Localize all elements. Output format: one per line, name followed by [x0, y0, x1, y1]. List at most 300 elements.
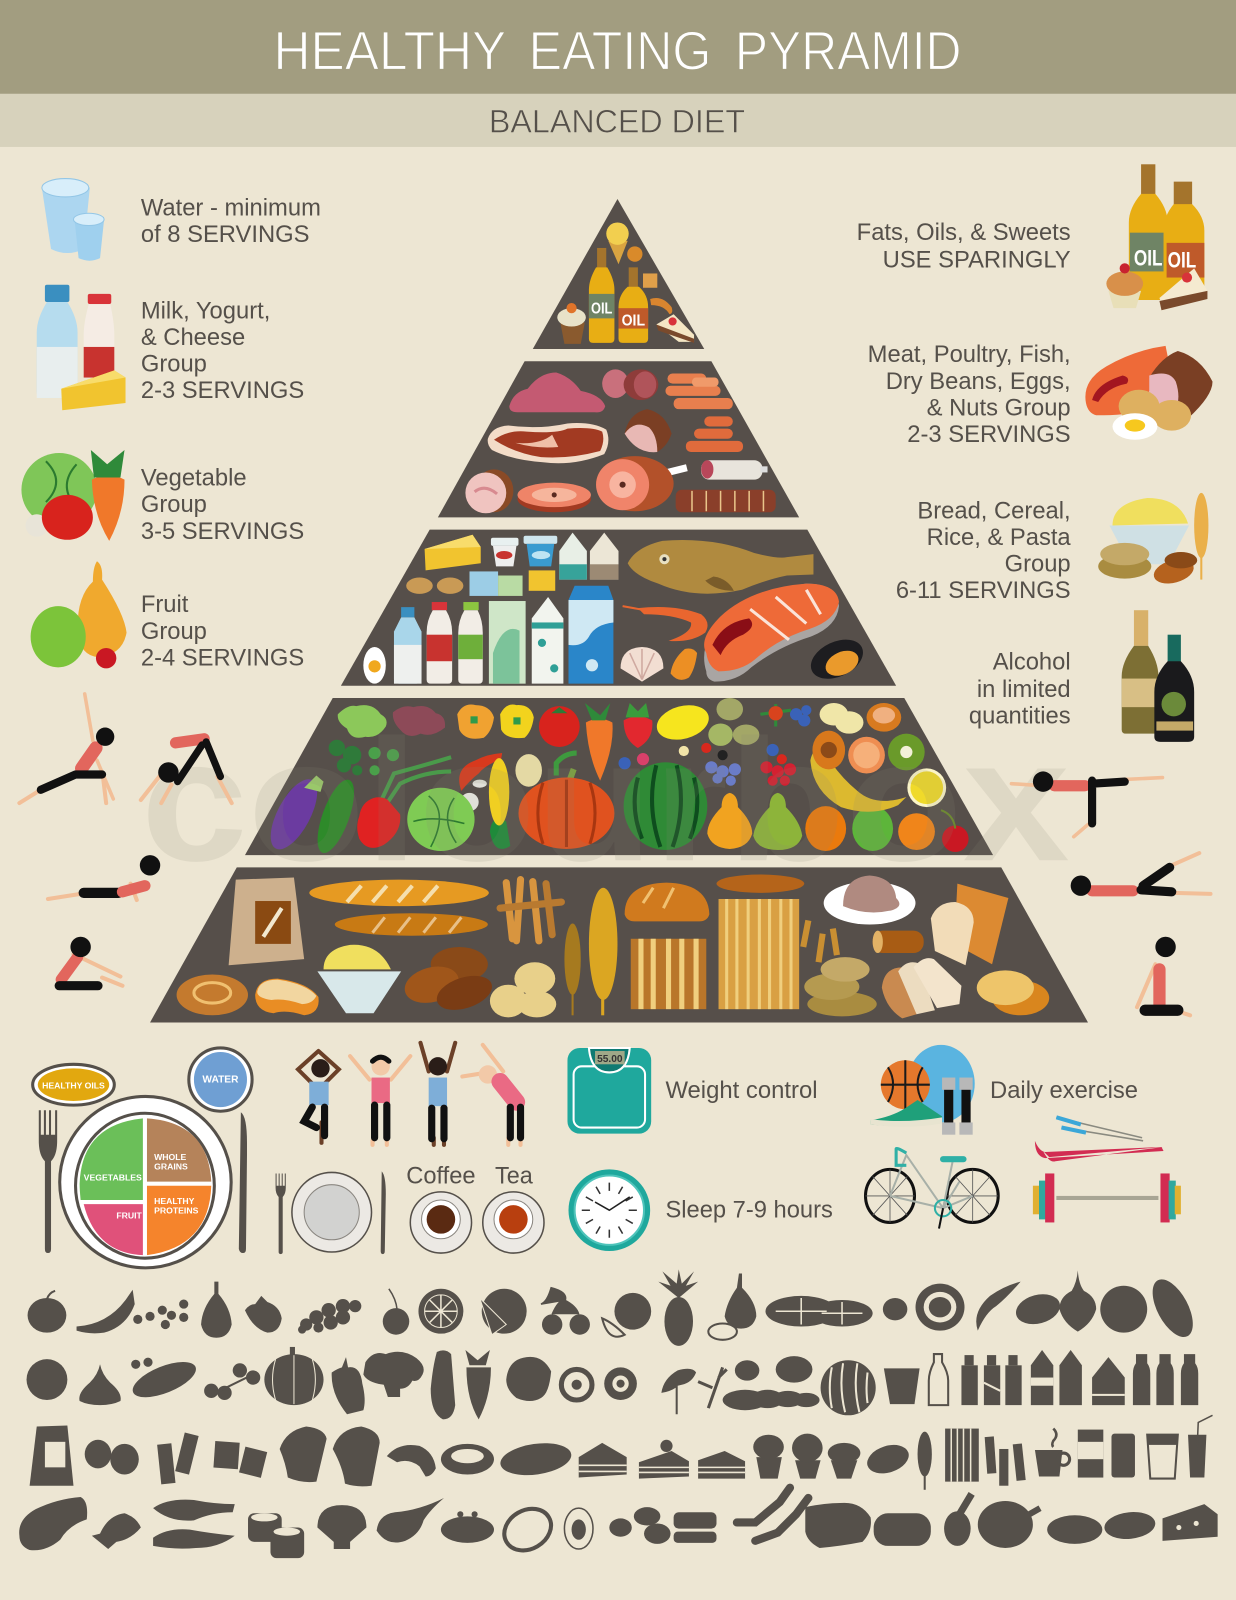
- small baguette: [716, 874, 804, 893]
- cupcake: [792, 1434, 823, 1479]
- bread: [333, 1427, 380, 1486]
- person: side bend: [462, 1045, 521, 1145]
- pepper: [332, 1357, 365, 1414]
- cherry: [941, 810, 969, 852]
- figure: forward bend: [141, 739, 232, 803]
- lemon: [653, 700, 713, 745]
- cheese wedge: [425, 535, 481, 570]
- carton: [1059, 1350, 1082, 1405]
- biscuits: [804, 957, 877, 1016]
- strawberry drink: [427, 602, 452, 684]
- tier 5: bread and grains: [150, 867, 1088, 1022]
- carrot: [465, 1350, 491, 1419]
- right legend: [857, 164, 1213, 742]
- mussel: [805, 632, 869, 687]
- fusilli: [985, 1436, 1026, 1486]
- salami: [602, 369, 658, 400]
- pear pair: [708, 1273, 756, 1340]
- people exercising: [298, 1043, 521, 1145]
- bowl of mash: [317, 945, 401, 1013]
- garlic: [79, 1364, 121, 1405]
- fish: [153, 1500, 235, 1521]
- icon: bicycle: [866, 1148, 998, 1229]
- fish: [628, 540, 813, 594]
- yogurt: [491, 538, 518, 566]
- chili: [976, 1282, 1021, 1331]
- flour bag: [30, 1426, 73, 1486]
- sausages: [686, 416, 743, 452]
- bean: [1103, 1510, 1157, 1541]
- tea label: Tea: [495, 1163, 533, 1190]
- icon: coffee cup: [410, 1192, 472, 1253]
- spaghetti: [719, 899, 799, 1009]
- slices and potatoes: [723, 1356, 820, 1410]
- corn: [489, 758, 510, 849]
- eggs: [406, 578, 463, 594]
- meat text: 2-3 SERVINGS: [907, 421, 1071, 448]
- garlic: [460, 780, 487, 811]
- figure: warrior pose: [1011, 771, 1163, 837]
- coffee label: Coffee: [406, 1163, 476, 1190]
- herb: [698, 1367, 727, 1408]
- row 3: grains and sweets silhouettes: [30, 1415, 1213, 1490]
- bread: [280, 1427, 327, 1482]
- bottle: [1133, 1354, 1150, 1405]
- carrot: [585, 703, 613, 781]
- smoked sausage link: [676, 490, 776, 512]
- meat text: Dry Beans, Eggs,: [886, 368, 1071, 395]
- fruit text: Group: [141, 618, 207, 645]
- icon: oils and sweets: OIL: [1168, 247, 1196, 272]
- baguette: [309, 880, 489, 906]
- gourd slice: [916, 1284, 965, 1331]
- short pasta: [631, 939, 706, 1009]
- bottle: [961, 1355, 978, 1405]
- lettuce: [363, 1352, 424, 1397]
- blue carton: [568, 586, 613, 684]
- icon: empty plate: [292, 1172, 372, 1252]
- crackers: [213, 1441, 267, 1478]
- cake: [579, 1443, 627, 1478]
- peas: [368, 747, 399, 776]
- oil bottle: OIL: [591, 300, 612, 317]
- ham: [978, 1501, 1040, 1548]
- banana slices: [820, 703, 863, 734]
- pumpkin: [518, 768, 614, 849]
- meat slice: [1047, 1515, 1102, 1544]
- cup: [884, 1368, 920, 1404]
- orange fruit: [805, 806, 846, 851]
- strawberry: [245, 1296, 282, 1333]
- bottle: [1156, 1354, 1174, 1405]
- fruit text: 2-4 SERVINGS: [141, 644, 304, 671]
- water text: Water - minimum: [141, 194, 321, 221]
- carton: [1031, 1350, 1053, 1405]
- round ham: [465, 469, 513, 513]
- figure: plank leg lift: [1071, 853, 1210, 896]
- bread slices: [882, 958, 961, 1018]
- milk text: & Cheese: [141, 324, 245, 351]
- bread text: 6-11 SERVINGS: [896, 577, 1071, 604]
- baguette: [335, 913, 488, 936]
- jar: [1078, 1430, 1103, 1478]
- cookie: [627, 246, 642, 262]
- round loaf: [625, 883, 709, 921]
- lettuce: [338, 705, 387, 738]
- chili: [459, 753, 502, 791]
- icon: knife: [239, 1112, 247, 1253]
- apple: [28, 1291, 66, 1333]
- icon: vegetables: [21, 450, 125, 541]
- small fusilli: [803, 920, 837, 962]
- cucumber: [128, 1355, 201, 1405]
- watermelon: [624, 762, 707, 850]
- vegetable text: Vegetable: [141, 465, 247, 492]
- burger: [674, 1512, 716, 1543]
- cupcake: [828, 1443, 860, 1479]
- small place setting: [276, 1171, 386, 1254]
- icon: water circle: WATER: [202, 1075, 239, 1086]
- bagel: [441, 1444, 494, 1474]
- icon: sports equipment: [871, 1045, 975, 1135]
- large wheat: [589, 888, 617, 1015]
- fats text: USE SPARINGLY: [883, 246, 1071, 273]
- basil: [556, 753, 577, 776]
- water text: of 8 SERVINGS: [141, 221, 310, 248]
- banana: [810, 746, 906, 812]
- salmon steak: [704, 584, 839, 682]
- silhouette icons: [19, 1269, 1218, 1559]
- small roll: [873, 931, 924, 953]
- tier 2: meat: [438, 361, 799, 517]
- bread rolls: [977, 970, 1049, 1015]
- green pear: [753, 793, 802, 850]
- milk text: 2-3 SERVINGS: [141, 377, 304, 404]
- potato: [863, 1440, 912, 1478]
- salami: [874, 1513, 931, 1546]
- ham chunk: [625, 409, 672, 452]
- bread loaf: [931, 884, 1008, 965]
- cupcake: [557, 303, 586, 344]
- icon: barbell: [1033, 1173, 1181, 1222]
- figure: triangle pose: [19, 694, 114, 803]
- toast: [255, 979, 319, 1015]
- cupcake: [753, 1435, 784, 1479]
- row 1: fruit silhouettes: [28, 1269, 1201, 1346]
- onion: [1059, 1270, 1096, 1332]
- yellow pepper: [500, 704, 534, 738]
- chart: MyPlate quadrants: [76, 1113, 214, 1258]
- person: tree pose: [298, 1051, 339, 1143]
- icon: ski poles: [1056, 1117, 1143, 1141]
- mussel: [497, 1501, 559, 1559]
- striped fish: [92, 1513, 141, 1549]
- icon: bread and cereal: [1098, 493, 1208, 588]
- subtitle: BALANCED DIET: [489, 103, 745, 140]
- meat slice: [517, 483, 591, 512]
- title: EATING: [529, 19, 711, 81]
- alcohol text: quantities: [969, 702, 1071, 729]
- pepper slice: [561, 1369, 592, 1400]
- pasta: [945, 1429, 979, 1482]
- pineapple: [658, 1269, 698, 1346]
- cheese wedge: [1163, 1504, 1218, 1541]
- berries: [133, 1299, 188, 1329]
- icon: ski blue handles: [1056, 1117, 1086, 1133]
- fruit slice: FRUIT: [116, 1210, 143, 1220]
- orange slice: [848, 737, 885, 773]
- potatoes: [490, 962, 556, 1017]
- egg: [564, 1508, 593, 1549]
- cheese cube: [529, 570, 555, 591]
- green apple: [852, 806, 893, 851]
- icon: skis: [1035, 1141, 1164, 1162]
- glass with straw: [1188, 1415, 1213, 1478]
- cookies: [85, 1440, 139, 1474]
- oil bottle: [589, 248, 614, 343]
- gooseberry: [883, 1298, 907, 1320]
- small carton: [590, 533, 619, 580]
- daily exercise label: Daily exercise: [990, 1077, 1138, 1104]
- milk text: Group: [141, 350, 207, 377]
- can: [1111, 1434, 1135, 1478]
- bread text: Rice, & Pasta: [927, 524, 1071, 551]
- teal carton: [532, 597, 563, 684]
- icon: small fork: [276, 1173, 286, 1254]
- croissant: [650, 298, 672, 314]
- grapes: [298, 1299, 361, 1334]
- blue grapes: [705, 761, 741, 786]
- loaf: [498, 1439, 573, 1479]
- purple lettuce: [393, 706, 445, 736]
- fruit slice: [84, 1204, 143, 1255]
- weight control label: Weight control: [665, 1077, 818, 1104]
- shell: [317, 1505, 366, 1549]
- icon: meat, fish, eggs: [1085, 346, 1213, 440]
- strawberry: [624, 703, 652, 748]
- alcohol text: Alcohol: [993, 648, 1071, 675]
- vegetables slice: VEGETABLES: [84, 1173, 142, 1183]
- icon: oils and sweets: OIL: [1134, 245, 1163, 270]
- cherry: [383, 1289, 409, 1335]
- milk text: Milk, Yogurt,: [141, 297, 270, 324]
- bottle: [1005, 1355, 1022, 1405]
- mound of raw meat: [509, 372, 605, 412]
- apple with slice: [602, 1293, 651, 1337]
- orange slice: [418, 1289, 463, 1334]
- oil bottle: [619, 267, 648, 343]
- oil bottle: OIL: [622, 313, 645, 330]
- whole grains slice: [147, 1118, 211, 1182]
- icon: milk, yogurt, cheese: [37, 285, 126, 410]
- bottle: [1181, 1354, 1198, 1405]
- title: PYRAMID: [735, 19, 961, 81]
- subheader band: [0, 94, 1236, 147]
- plate of meat: [824, 876, 916, 924]
- salmon steak: [19, 1497, 87, 1550]
- icon: small knife: [381, 1171, 386, 1254]
- cherries: [541, 1288, 590, 1335]
- vegetables slice: [80, 1118, 143, 1200]
- icon: clock: [568, 1169, 650, 1251]
- tier 3: dairy and fish: [341, 530, 896, 687]
- row 2: vegetables and dairy silhouettes: [27, 1347, 1198, 1419]
- gooseberries: [708, 698, 759, 746]
- crab: [441, 1511, 494, 1543]
- sleep label: Sleep 7-9 hours: [665, 1196, 833, 1223]
- tomato: [539, 706, 580, 747]
- lemon slice: [907, 768, 946, 807]
- tier 4: vegetables and fruit: [245, 698, 993, 857]
- cabbage: [407, 788, 475, 851]
- red pepper: [357, 797, 400, 848]
- steak: [805, 1503, 871, 1548]
- icon: healthy oils oval: [33, 1064, 114, 1105]
- biscuit bars: [157, 1433, 199, 1484]
- icon: fork: [39, 1110, 57, 1253]
- croissant: [387, 1445, 436, 1477]
- white salami: [701, 460, 768, 480]
- parsley: [204, 1363, 260, 1400]
- corn: [431, 1350, 455, 1419]
- big ham with bone: [596, 456, 688, 511]
- citrus slice: [604, 1367, 637, 1400]
- orange: [898, 813, 935, 850]
- cinnamon bun: [177, 974, 248, 1015]
- icon: fruit: [31, 561, 127, 668]
- orange pear: [707, 793, 752, 849]
- milk bottle: [929, 1354, 948, 1405]
- butter packs: [469, 571, 523, 596]
- carton: [1092, 1357, 1125, 1405]
- fish: [153, 1529, 235, 1549]
- milk bottle: [394, 607, 422, 684]
- blueberries: [790, 705, 811, 727]
- apricot half: [867, 703, 901, 732]
- icon: tea cup: [483, 1192, 544, 1253]
- fats text: Fats, Oils, & Sweets: [857, 219, 1071, 246]
- header band: [0, 0, 1236, 94]
- small carton: [559, 533, 587, 580]
- fusilli: [500, 880, 561, 941]
- pyramid: [150, 199, 1088, 1022]
- flour bag: [229, 878, 304, 965]
- healthy proteins slice: PROTEINS: [154, 1205, 199, 1215]
- tomato: [27, 1359, 67, 1400]
- pumpkin: [264, 1347, 324, 1405]
- sausage links: [737, 1488, 808, 1541]
- whole grains slice: WHOLE: [154, 1152, 187, 1162]
- icon: alcohol bottles: [1122, 610, 1194, 742]
- bottle: [984, 1355, 1000, 1405]
- steak: [488, 423, 608, 463]
- coffee cup: [1035, 1429, 1070, 1477]
- title: [274, 19, 961, 81]
- vegetable text: Group: [141, 491, 207, 518]
- glass: [1147, 1435, 1178, 1479]
- yoga figures: [19, 694, 1210, 1015]
- cabbage: [1100, 1286, 1147, 1333]
- orange half: [480, 1289, 527, 1335]
- apricot: [812, 731, 845, 769]
- bread text: Group: [1005, 550, 1071, 577]
- drumstick: [944, 1494, 972, 1546]
- watermark: colourbox: [141, 703, 1070, 897]
- tier 1: fats, oils and sweets: [533, 199, 704, 349]
- green onions: [378, 757, 451, 808]
- shell: [621, 647, 663, 682]
- title: HEALTHY: [274, 19, 506, 81]
- figure: cobra: [48, 855, 160, 900]
- plate rim: [60, 1096, 231, 1268]
- icon: healthy oils oval: HEALTHY OILS: [42, 1080, 105, 1090]
- bread text: Bread, Cereal,: [917, 497, 1071, 524]
- fruit text: Fruit: [141, 591, 189, 618]
- ice cream: [606, 222, 629, 264]
- alcohol text: in limited: [977, 676, 1071, 703]
- wheat: [918, 1432, 932, 1490]
- egg: [363, 647, 386, 684]
- beans: [609, 1507, 671, 1544]
- figure: seated stretch: [59, 937, 122, 986]
- shrimp: [623, 606, 708, 641]
- healthy proteins slice: HEALTHY: [154, 1196, 195, 1206]
- person: hands up: [421, 1043, 455, 1145]
- icon: oils and sweets: [1106, 164, 1207, 310]
- row 4: fish and meat silhouettes: [19, 1488, 1218, 1559]
- sushi: [248, 1513, 304, 1558]
- plate diagram: [33, 1048, 252, 1268]
- citrus slices: [765, 1296, 873, 1327]
- cake: [639, 1440, 689, 1479]
- vegetable text: 3-5 SERVINGS: [141, 518, 304, 545]
- onion: [515, 754, 542, 787]
- cracker: [643, 273, 657, 288]
- red currants: [760, 761, 796, 786]
- whole grains slice: GRAINS: [154, 1161, 188, 1171]
- kiwi: [888, 734, 925, 770]
- pile of sausages: [665, 373, 733, 409]
- meat text: Meat, Poultry, Fish,: [868, 341, 1071, 368]
- small wheat: [564, 923, 581, 1015]
- green drink: [458, 602, 483, 684]
- left legend: [21, 179, 321, 671]
- pear: [201, 1282, 232, 1338]
- banana: [77, 1290, 135, 1333]
- cake: [698, 1451, 745, 1479]
- peas pod: [661, 1369, 696, 1414]
- icon: water glasses: [42, 179, 104, 261]
- watermelon: [821, 1360, 876, 1415]
- icon: water circle: [189, 1048, 252, 1111]
- mixed small berries: [619, 743, 787, 769]
- bell pepper: [506, 1357, 551, 1401]
- figure: kneeling: [1137, 937, 1190, 1015]
- green carton: [489, 601, 526, 684]
- parsley: [329, 740, 362, 776]
- shrimp: [377, 1498, 444, 1542]
- cucumber: [310, 775, 362, 857]
- eggplant: [1144, 1273, 1201, 1343]
- icon: weighing scale: 55.00: [597, 1054, 623, 1065]
- lemon: [1013, 1290, 1063, 1329]
- cake slice: [656, 314, 694, 343]
- healthy proteins slice: [147, 1186, 211, 1255]
- person: arms raised: [350, 1056, 410, 1145]
- icon: weighing scale: [567, 1048, 651, 1134]
- brown breads: [401, 947, 496, 1016]
- eggplant: [261, 772, 327, 856]
